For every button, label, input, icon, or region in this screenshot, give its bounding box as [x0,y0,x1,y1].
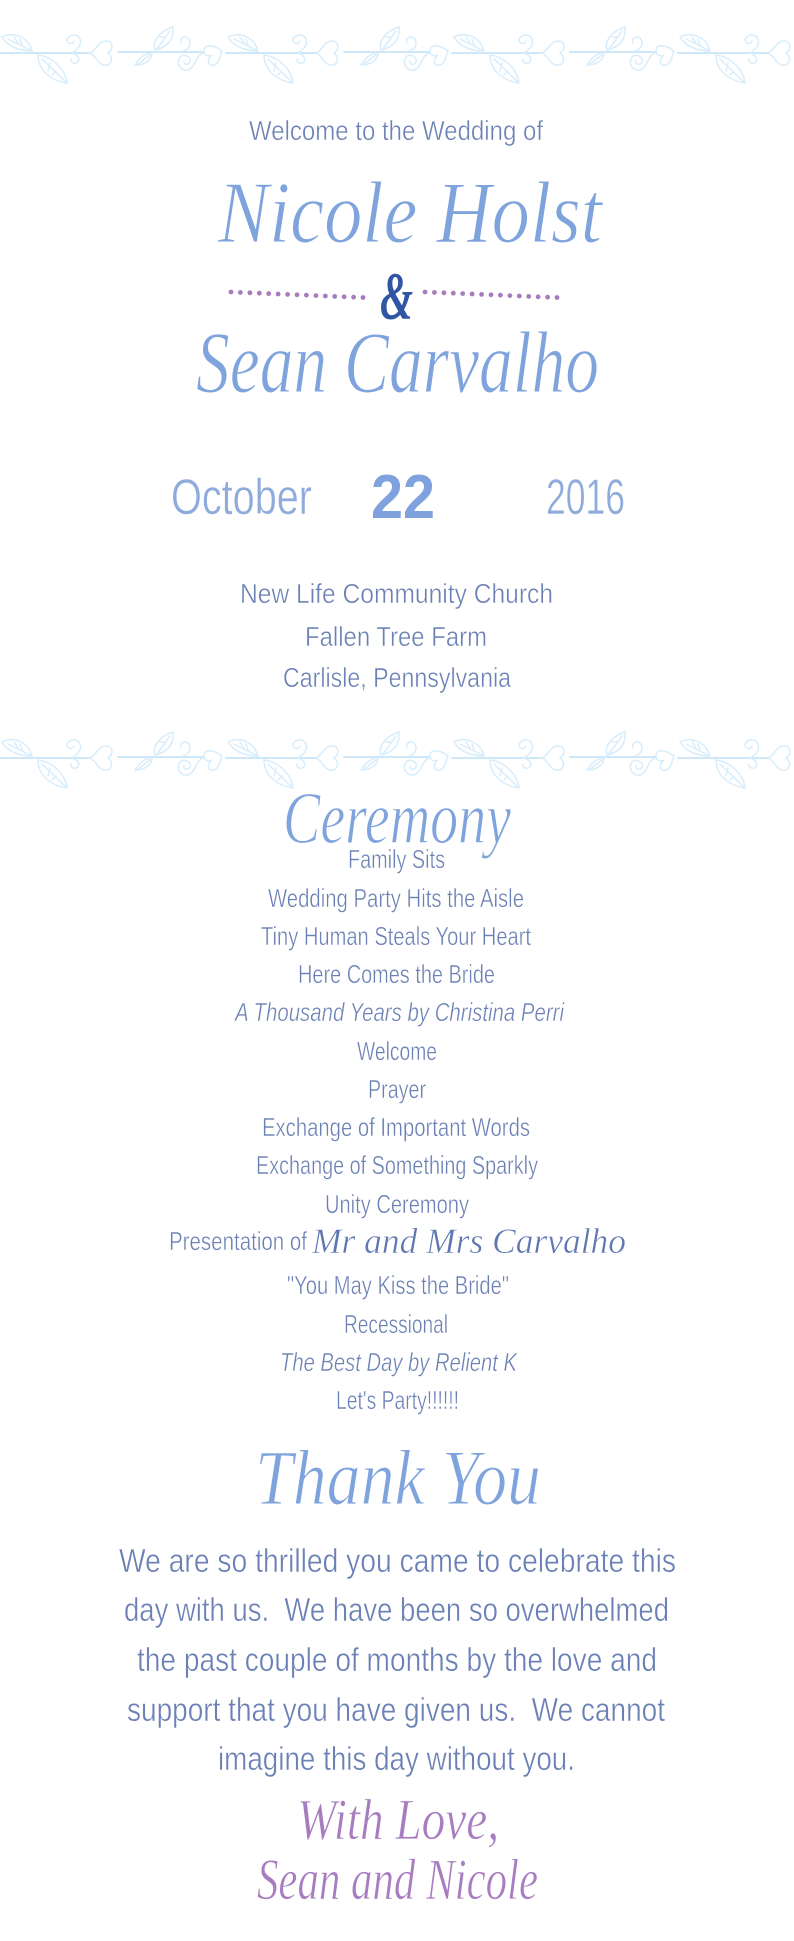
ceremony order list: Prayer [368,1074,426,1104]
right dotted line [423,290,559,300]
ceremony order list: Presentation of [169,1226,308,1256]
venue block: Carlisle, Pennsylvania [283,662,511,693]
ampersand: & [380,258,413,334]
signature: with love: With Love, [297,1787,499,1852]
thank you message [119,1542,676,1777]
day: 22 [371,463,435,532]
thank you message: day with us. We have been so overwhelmed [124,1591,669,1628]
groom name: Sean Carvalho [196,315,599,412]
thank you message: support that you have given us. We cannot [127,1691,665,1728]
ceremony order list: Mr and Mrs Carvalho [311,1221,626,1261]
ceremony order list [169,844,626,1415]
decorative vine banner: middle [0,732,794,788]
bride name: Nicole Holst [217,165,604,262]
welcome heading: Welcome to the Wedding of [249,115,543,146]
ceremony heading: Ceremony [283,778,511,860]
year: 2016 [546,469,625,525]
ampersand divider [229,258,559,334]
signature: names: Sean and Nicole [257,1847,538,1912]
thank you message: imagine this day without you. [218,1740,575,1777]
date [171,463,625,532]
decorative vine banner: top [0,27,794,83]
ceremony order list: Exchange of Important Words [262,1112,530,1142]
thank you message: the past couple of months by the love and [137,1641,657,1678]
left dotted line [229,290,365,300]
ceremony order list: Let's Party!!!!!! [336,1385,459,1415]
thank you message: We are so thrilled you came to celebrate this [119,1542,676,1579]
ceremony order list: Tiny Human Steals Your Heart [261,921,532,951]
ceremony order list: Welcome [357,1036,437,1066]
ceremony order list: A Thousand Years by Christina Perri [233,997,565,1027]
ceremony order list: "You May Kiss the Bride" [287,1270,509,1300]
month: October [171,469,312,525]
ceremony order list: Family Sits [348,844,445,874]
venue block: New Life Community Church [240,578,553,609]
thank you heading: Thank You [255,1434,541,1521]
venue block [240,578,553,693]
ceremony order list: Here Comes the Bride [298,959,495,989]
ceremony order list: Recessional [344,1309,448,1339]
ceremony order list: The Best Day by Relient K [280,1347,518,1377]
ceremony order list: Unity Ceremony [325,1189,469,1219]
ceremony order list: Exchange of Something Sparkly [256,1150,538,1180]
venue block: Fallen Tree Farm [305,621,487,652]
ceremony order list: Wedding Party Hits the Aisle [268,883,524,913]
